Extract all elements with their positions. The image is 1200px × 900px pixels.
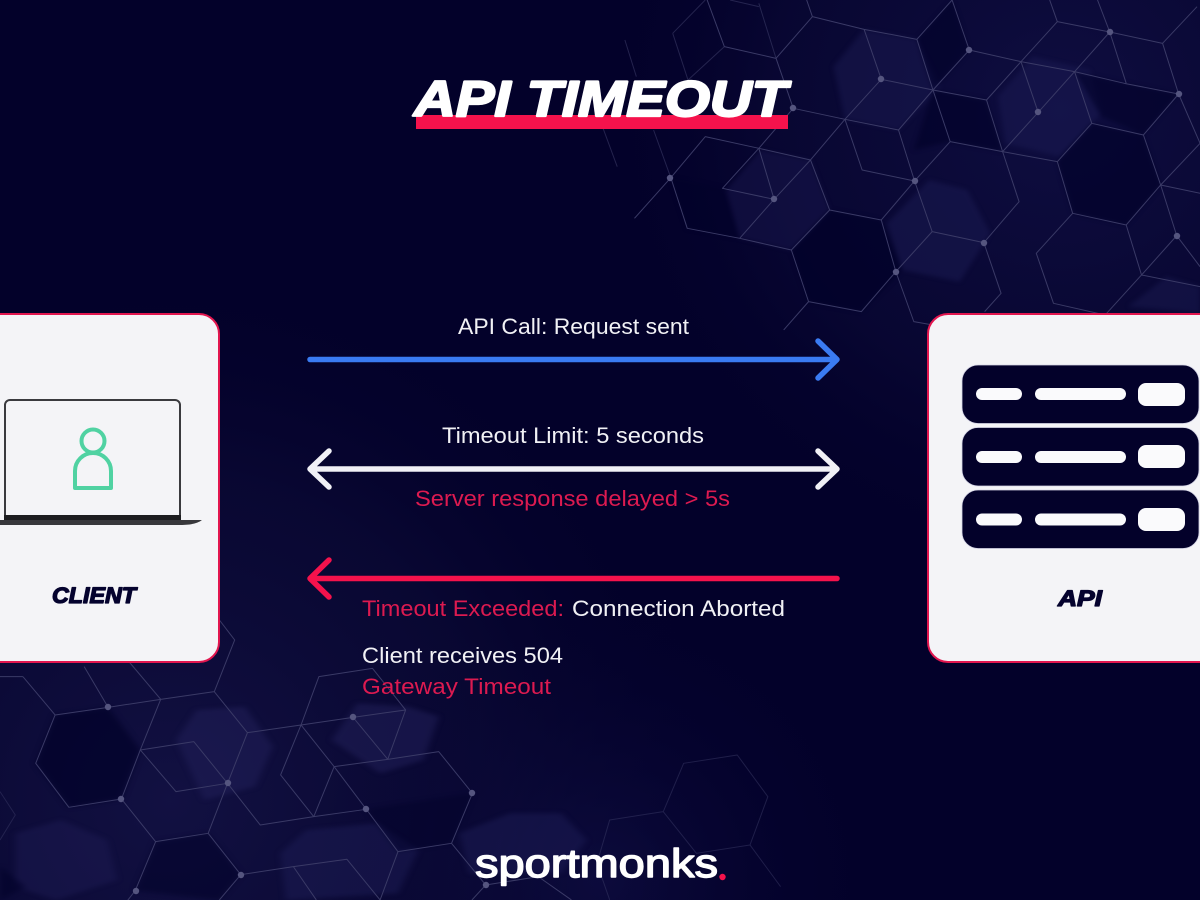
logo: sportmonks: sportmonks [475, 842, 718, 886]
title [412, 71, 792, 129]
icon: user [75, 430, 111, 488]
client result text: Gateway Timeout [362, 674, 551, 699]
client label: CLIENT [52, 583, 138, 608]
arrow: timeout window [310, 451, 837, 487]
request label: API Call: Request sent [458, 314, 689, 339]
arrow: aborted response [310, 560, 837, 597]
api label: API [1057, 586, 1103, 611]
server row 2 [962, 428, 1199, 486]
hexagon network: bottom [0, 620, 781, 900]
arrow: request [310, 341, 837, 378]
timeout exceeded text: Timeout Exceeded: [362, 596, 564, 621]
server row 3 [962, 490, 1199, 548]
panel: client [0, 314, 219, 662]
title underline [416, 115, 788, 129]
server row 1 [962, 365, 1199, 424]
timeout exceeded text: Connection Aborted [572, 596, 785, 621]
client result text: Client receives 504 [362, 643, 563, 668]
icon: server rack [962, 365, 1199, 548]
panel: api [928, 314, 1200, 662]
timeout limit label: Timeout Limit: 5 seconds [442, 423, 704, 448]
timeout exceeded text [362, 596, 785, 621]
delay label: Server response delayed > 5s [415, 486, 730, 511]
icon: laptop [0, 400, 202, 525]
title text: API TIMEOUT [412, 71, 792, 127]
client result text [362, 643, 563, 699]
hexagon network: top right [600, 0, 1200, 330]
